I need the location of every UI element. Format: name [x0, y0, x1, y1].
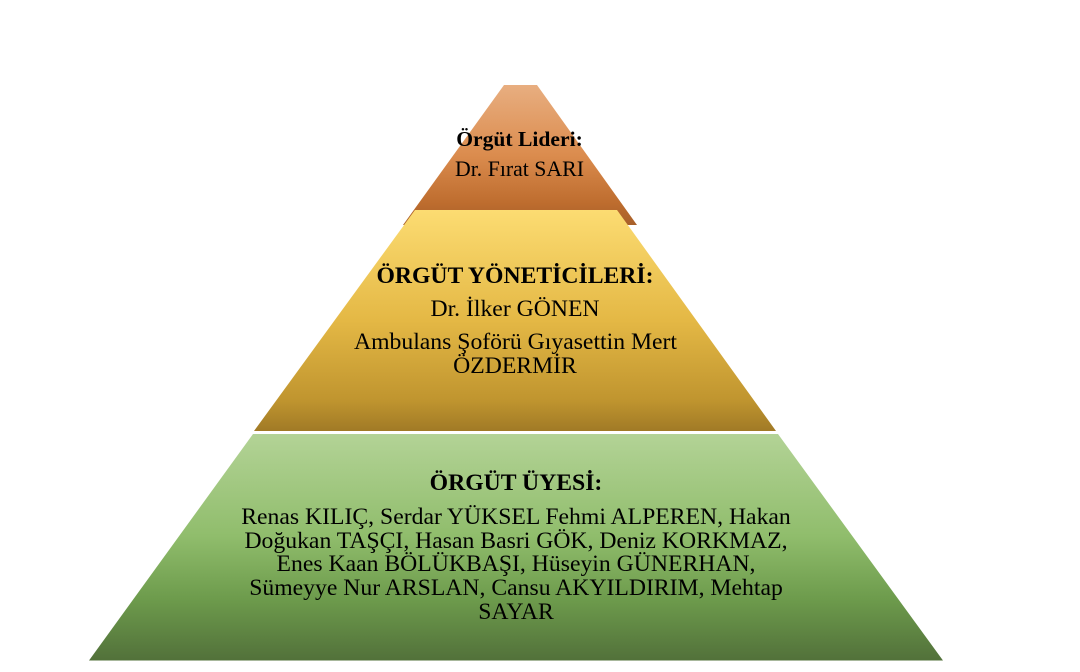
leader tier shape	[403, 85, 637, 225]
members heading: ÖRGÜT ÜYESİ:	[430, 470, 602, 496]
panel: members tier	[89, 434, 943, 660]
panel: leader tier	[403, 85, 637, 225]
members list	[241, 504, 791, 625]
members list: Doğukan TAŞÇI, Hasan Basri GÖK, Deniz KORKMAZ,	[244, 528, 788, 554]
members tier shape	[89, 434, 943, 660]
manager name 2 continued: ÖZDERMİR	[453, 353, 577, 379]
managers tier shape	[254, 210, 776, 431]
members list: Enes Kaan BÖLÜKBAŞI, Hüseyin GÜNERHAN,	[277, 551, 755, 577]
manager name 2: Ambulans Şoförü Gıyasettin Mert	[354, 329, 677, 355]
members list: Renas KILIÇ, Serdar YÜKSEL Fehmi ALPEREN, Hakan	[241, 504, 791, 530]
members list: Sümeyye Nur ARSLAN, Cansu AKYILDIRIM, Mehtap	[249, 575, 783, 601]
managers heading: ÖRGÜT YÖNETİCİLERİ:	[376, 263, 654, 289]
leader heading: Örgüt Lideri:	[456, 127, 583, 151]
manager name 1: Dr. İlker GÖNEN	[430, 296, 600, 322]
members list: SAYAR	[478, 599, 554, 625]
leader name: Dr. Fırat SARI	[455, 157, 584, 181]
panel: managers tier	[254, 210, 776, 431]
